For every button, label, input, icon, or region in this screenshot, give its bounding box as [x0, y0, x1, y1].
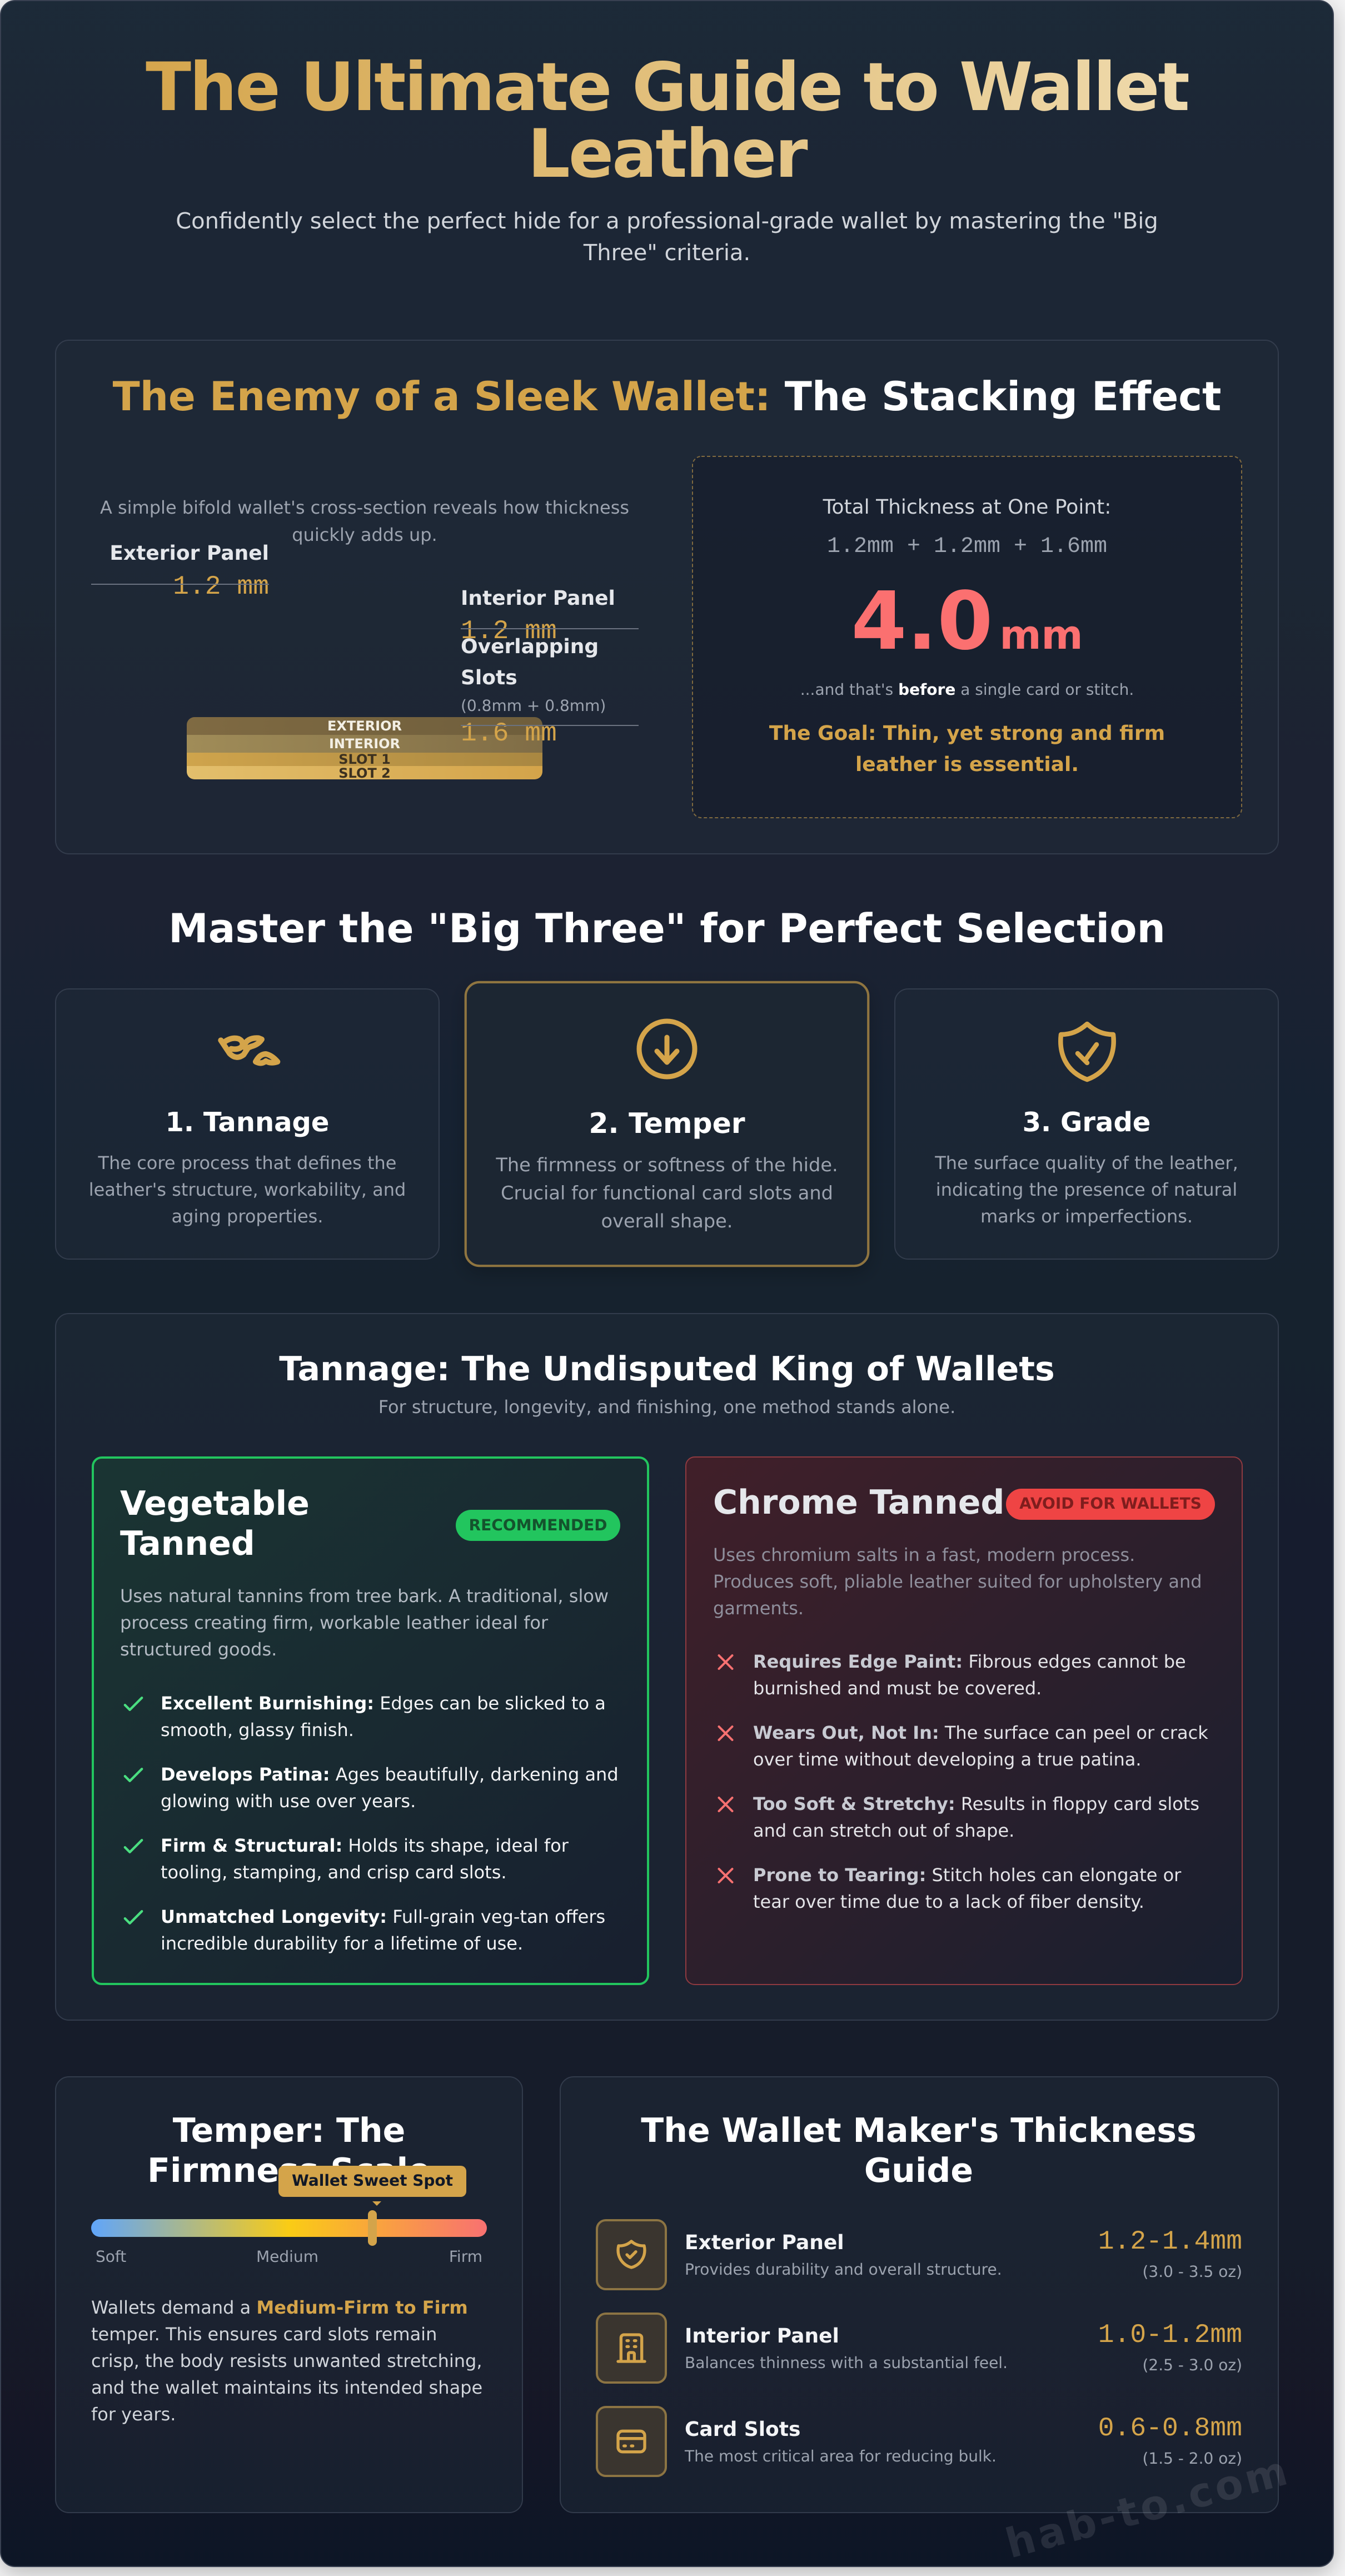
description: [120, 1585, 609, 1660]
wallet layer bar: EXTERIOR: [327, 718, 402, 734]
section heading: big three: Master the "Big Three" for Perfect Selection: [168, 905, 1165, 952]
wallet layer bar: SLOT 2: [338, 765, 391, 781]
temper text: and the wallet maintains its intended shape: [91, 2377, 482, 2398]
subtitle: Confidently select the perfect hide for a professional-grade wallet by mastering the "Big: [176, 208, 1158, 234]
temper text: [91, 2297, 482, 2425]
badge: avoid: AVOID FOR WALLETS: [1019, 1494, 1202, 1513]
item: too soft: and can stretch out of shape.: [753, 1820, 1014, 1841]
item: firm: [125, 1835, 569, 1883]
cross-section description: quickly adds up.: [292, 524, 437, 545]
item: longevity: [125, 1906, 605, 1954]
callout: interior panel: 1.2 mm: [461, 616, 557, 647]
item: wears out: Wears Out, Not In: The surface can peel or crack: [753, 1722, 1208, 1743]
heading: tannage: Tannage: The Undisputed King of Wallets: [279, 1350, 1055, 1389]
heading: thickness guide: Guide: [864, 2151, 973, 2190]
card text: marks or imperfections.: [980, 1206, 1193, 1227]
row: exterior panel: (3.0 - 3.5 oz): [1142, 2262, 1242, 2281]
card text: leather's structure, workability, and: [89, 1179, 406, 1200]
wallet layer bar: INTERIOR: [329, 736, 400, 752]
callout: interior panel: [461, 587, 639, 647]
temper text: temper. This ensures card slots remain: [91, 2324, 437, 2345]
heading: temper: [147, 2111, 431, 2190]
row: exterior panel: 1.2-1.4mm: [1098, 2227, 1242, 2257]
description: garments.: [713, 1598, 804, 1619]
big number: 4.0mm: [851, 574, 1083, 668]
description: structured goods.: [120, 1639, 277, 1660]
marker: [368, 2210, 377, 2246]
watermark: hab-to.com: [1001, 2446, 1296, 2568]
card text: aging properties.: [171, 1206, 323, 1227]
con list: [719, 1651, 1208, 1912]
item: patina: [125, 1764, 619, 1812]
item: too soft: Too Soft & Stretchy: Results in floppy card slots: [753, 1793, 1199, 1814]
row: interior panel: [597, 2314, 1242, 2383]
row: interior panel: Interior Panel: [685, 2325, 839, 2348]
card title: 3. Grade: [1023, 1107, 1150, 1138]
title: Leather: [527, 116, 808, 193]
callout: overlapping slots: (0.8mm + 0.8mm): [461, 697, 606, 715]
heading: temper: Firmness Scale: [147, 2151, 431, 2190]
heading: enemy of a sleek wallet: The Enemy of a Sleek Wallet: The Stacking Effect: [113, 373, 1221, 420]
card text: The core process that defines the: [98, 1152, 396, 1173]
item: patina: Develops Patina: Ages beautifully, darkening and: [161, 1764, 619, 1785]
callout: overlapping slots: [461, 635, 639, 749]
row: card slots: Card Slots: [685, 2418, 800, 2441]
row: card slots: 0.6-0.8mm: [1098, 2414, 1242, 2444]
cross-section description: A simple bifold wallet's cross-section reveals how thickness: [100, 497, 629, 518]
callout: interior panel: Interior Panel: [461, 587, 615, 610]
panel: temper scale: [56, 2077, 522, 2513]
row: card slots: The most critical area for reducing bulk.: [684, 2447, 997, 2465]
row: card slots: (1.5 - 2.0 oz): [1142, 2449, 1242, 2468]
title: [146, 49, 1189, 193]
tooltip: wallet sweet spot: [278, 2166, 466, 2206]
tooltip: wallet sweet spot: Wallet Sweet Spot: [292, 2171, 453, 2190]
card text: Crucial for functional card slots and: [501, 1182, 833, 1204]
row: exterior panel: Exterior Panel: [685, 2231, 844, 2254]
description: Uses chromium salts in a fast, modern process.: [713, 1544, 1135, 1565]
callout: overlapping slots: Slots: [461, 667, 517, 689]
item: tearing: Prone to Tearing: Stitch holes can elongate or: [753, 1864, 1182, 1886]
temper text: crisp, the body resists unwanted stretching,: [91, 2350, 482, 2371]
badge: recommended: RECOMMENDED: [469, 1516, 607, 1534]
before note: ...and that's before a single card or stitch.: [800, 680, 1134, 699]
title: The Ultimate Guide to Wallet: [146, 49, 1189, 126]
thickness sum: 1.2mm + 1.2mm + 1.6mm: [827, 534, 1107, 559]
icon: arrow circle: [639, 1021, 695, 1077]
row: card slots: [597, 2407, 1242, 2476]
temper text: for years.: [91, 2404, 176, 2425]
card title: 2. Temper: [589, 1107, 745, 1140]
row: exterior panel: Provides durability and overall structure.: [685, 2260, 1002, 2279]
subheading: For structure, longevity, and finishing, one method stands alone.: [378, 1396, 955, 1418]
heading: temper: Temper: The: [173, 2111, 405, 2150]
card: chrome tanned: [686, 1457, 1242, 1985]
scale labels: Firm: [449, 2247, 482, 2266]
card text: indicating the presence of natural: [936, 1179, 1237, 1200]
panel: thickness guide: [560, 2077, 1278, 2513]
goal: leather is essential.: [855, 753, 1079, 776]
item: tearing: [719, 1864, 1182, 1912]
row: interior panel: Balances thinness with a substantial feel.: [685, 2354, 1008, 2372]
description: Produces soft, pliable leather suited for upholstery and: [713, 1571, 1202, 1592]
firmness gradient bar: [91, 2219, 487, 2237]
card title: Tanned: [120, 1524, 255, 1563]
total thickness box: [693, 456, 1242, 818]
item: burnishing: smooth, glassy finish.: [161, 1719, 354, 1740]
card title: 1. Tannage: [166, 1107, 329, 1138]
total label: Total Thickness at One Point:: [823, 496, 1111, 519]
icon: shield check: [1060, 1024, 1114, 1080]
card: temper: [466, 982, 868, 1266]
description: Uses natural tannins from tree bark. A traditional, slow: [120, 1585, 609, 1607]
wallet layer bar: SLOT 1: [338, 752, 391, 767]
callout: exterior panel: Exterior Panel: [109, 542, 269, 565]
item: longevity: incredible durability for a lifetime of use.: [161, 1933, 523, 1954]
row: interior panel: 1.0-1.2mm: [1098, 2320, 1242, 2350]
card: vegetable tanned: [93, 1458, 648, 1984]
callout: exterior panel: [91, 542, 269, 602]
callout: overlapping slots: 1.6 mm: [461, 719, 557, 749]
card title: Chrome Tanned: [713, 1483, 1004, 1522]
subtitle: Three" criteria.: [583, 240, 750, 266]
item: too soft: [719, 1793, 1199, 1841]
goal: The Goal: Thin, yet strong and firm: [769, 722, 1165, 745]
panel: tannage comparison: [56, 1314, 1278, 2020]
panel: stacking effect: [56, 340, 1278, 854]
card title: [120, 1484, 310, 1563]
scale labels: Soft: [96, 2247, 126, 2266]
item: firm: tooling, stamping, and crisp card slots.: [161, 1862, 507, 1883]
card title: Vegetable: [120, 1484, 310, 1523]
icon: leaves: [221, 1038, 277, 1063]
temper text: Wallets demand a Medium-Firm to Firm: [91, 2297, 468, 2318]
item: burnishing: Excellent Burnishing: Edges can be slicked to a: [161, 1693, 606, 1714]
wallet layer bar: [187, 717, 542, 781]
item: burnishing: [125, 1693, 606, 1740]
card: grade: [895, 989, 1278, 1259]
scale labels: Medium: [256, 2247, 318, 2266]
card text: [495, 1154, 838, 1232]
pro list: [125, 1693, 619, 1954]
card text: [89, 1152, 406, 1227]
heading: thickness guide: [641, 2111, 1197, 2190]
card: tannage: [56, 989, 439, 1259]
callout: exterior panel: 1.2 mm: [173, 572, 269, 602]
callout: overlapping slots: Overlapping: [461, 635, 599, 658]
item: patina: glowing with use over years.: [161, 1791, 416, 1812]
scale labels: [96, 2247, 482, 2266]
item: edge paint: Requires Edge Paint: Fibrous edges cannot be: [753, 1651, 1186, 1672]
badge: recommended: [456, 1510, 620, 1541]
subtitle: [176, 208, 1158, 266]
item: wears out: over time without developing a true patina.: [753, 1749, 1142, 1770]
card text: [934, 1152, 1238, 1227]
item: edge paint: [719, 1651, 1186, 1699]
card text: The firmness or softness of the hide.: [495, 1154, 838, 1176]
item: firm: Firm & Structural: Holds its shape, ideal for: [161, 1835, 569, 1856]
row: exterior panel: [597, 2220, 1242, 2289]
badge: avoid: [1006, 1489, 1215, 1520]
item: wears out: [719, 1722, 1208, 1770]
heading: thickness guide: The Wallet Maker's Thickness: [641, 2111, 1197, 2150]
description: process creating firm, workable leather ideal for: [120, 1612, 549, 1633]
cross-section description: [100, 497, 629, 545]
goal: [769, 722, 1165, 776]
description: [713, 1544, 1202, 1619]
header: [146, 49, 1189, 266]
item: tearing: tear over time due to a lack of fiber density.: [753, 1891, 1144, 1912]
card text: The surface quality of the leather,: [934, 1152, 1238, 1173]
row: interior panel: (2.5 - 3.0 oz): [1142, 2356, 1242, 2374]
item: longevity: Unmatched Longevity: Full-grain veg-tan offers: [161, 1906, 605, 1927]
item: edge paint: burnished and must be covered.: [753, 1678, 1042, 1699]
card text: overall shape.: [601, 1210, 733, 1232]
